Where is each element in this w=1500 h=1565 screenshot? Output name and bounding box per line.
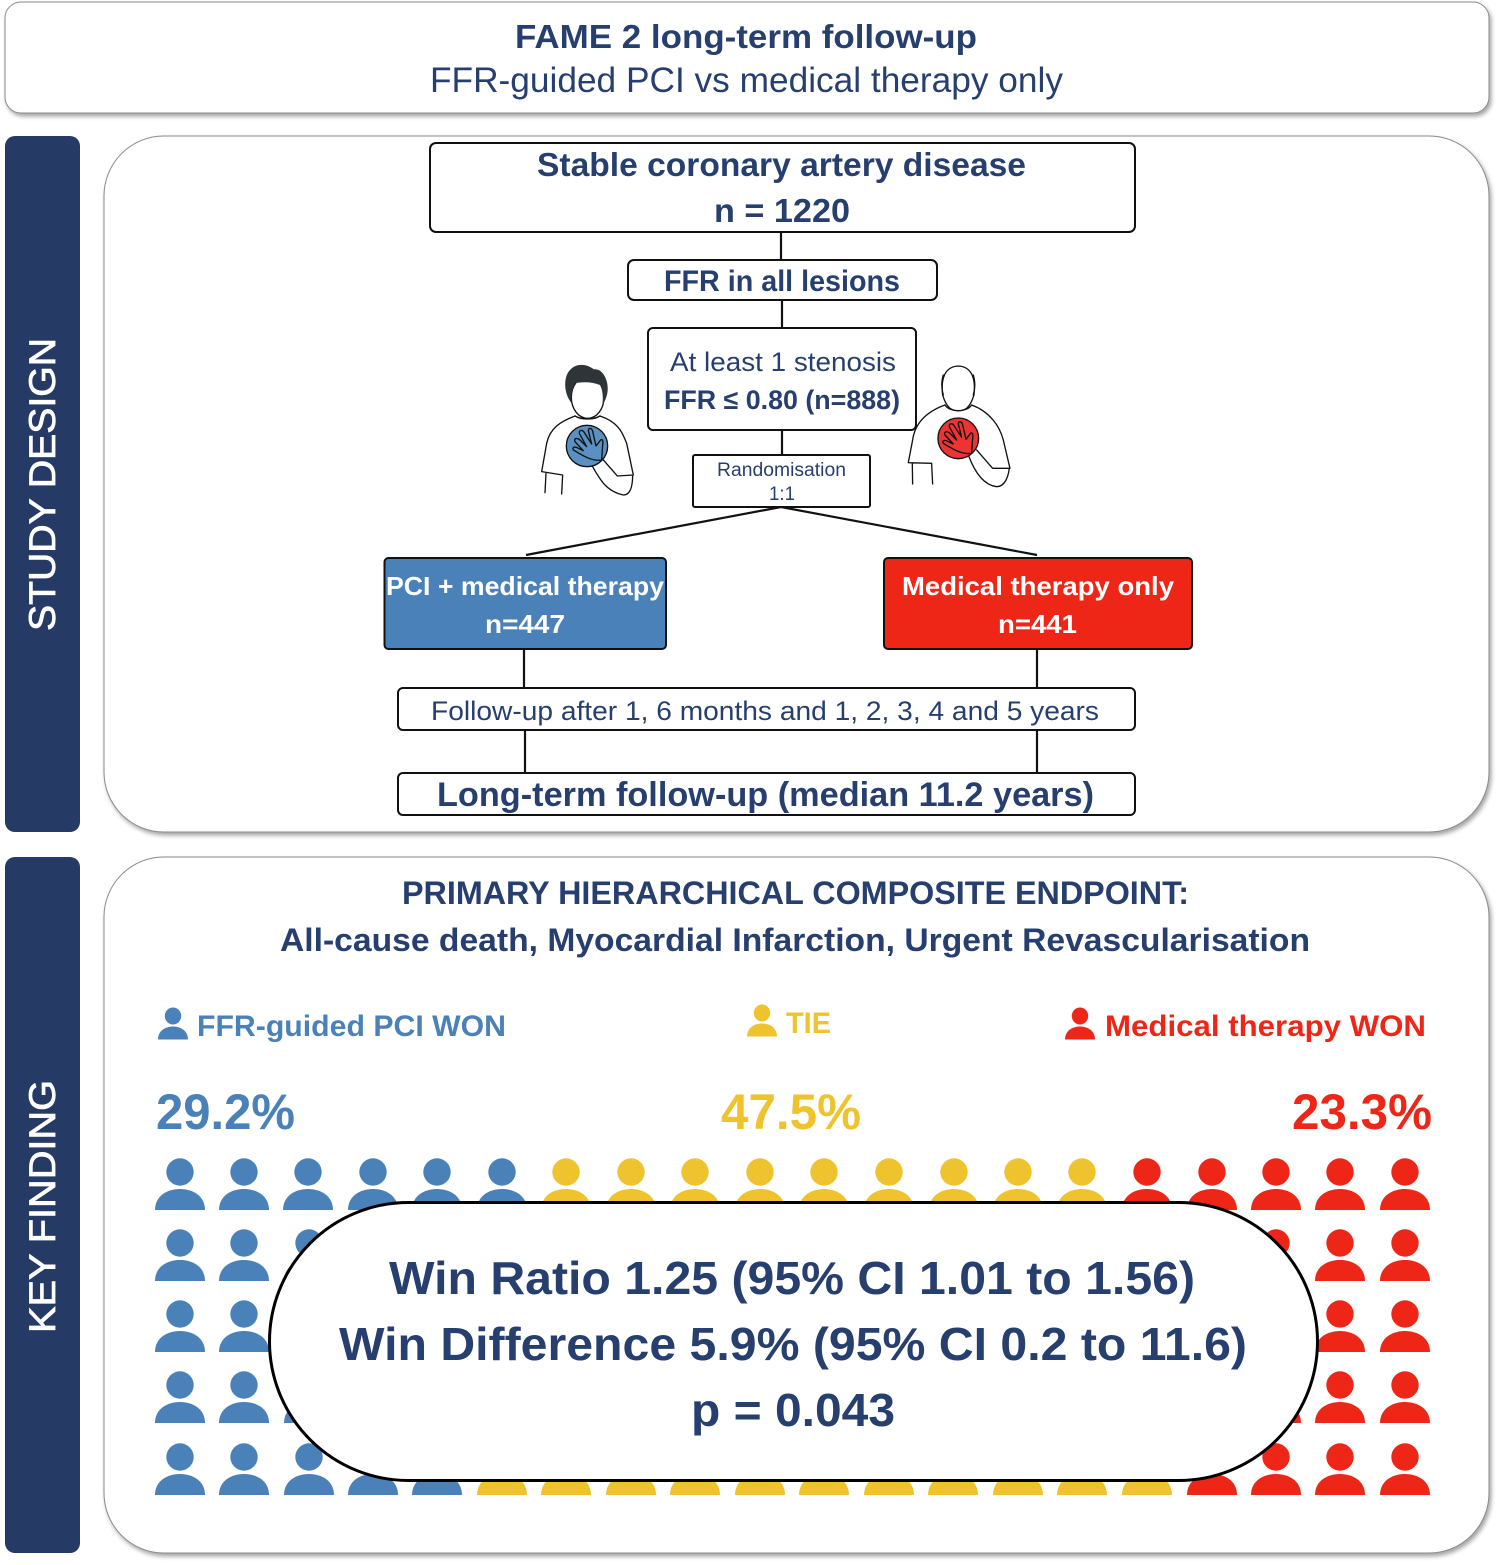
box: medical therapy arm: Medical therapy only xyxy=(902,571,1175,601)
box: FFR in all lesions: FFR in all lesions xyxy=(664,265,900,298)
legend: FFR-guided PCI won: FFR-guided PCI WON xyxy=(197,1010,506,1043)
pictogram: 100 patient icons xyxy=(155,1158,1430,1495)
sidebar: study design xyxy=(5,136,80,832)
endpoint heading: All-cause death, Myocardial Infarction, Urgent Revascularisation xyxy=(280,922,1310,958)
box: FFR in all lesions xyxy=(628,260,937,300)
sidebar: key finding: KEY FINDING xyxy=(22,1080,63,1333)
box: follow-up schedule: Follow-up after 1, 6 months and 1, 2, 3, 4 and 5 years xyxy=(431,696,1099,726)
percentage: FFR-guided PCI: 29.2% xyxy=(156,1084,295,1140)
subtitle: FFR-guided PCI vs medical therapy only xyxy=(430,61,1063,100)
callout: win ratio results: p = 0.043 xyxy=(691,1384,895,1436)
percentage: tie: 47.5% xyxy=(721,1084,861,1140)
box: stable coronary artery disease: Stable coronary artery disease xyxy=(537,146,1026,183)
box: long-term follow-up: Long-term follow-up (median 11.2 years) xyxy=(437,776,1094,814)
box: stable coronary artery disease xyxy=(430,143,1135,232)
legend: medical therapy won: Medical therapy WON xyxy=(1105,1010,1426,1043)
endpoint heading xyxy=(280,875,1310,958)
box: medical therapy arm: n=441 xyxy=(998,609,1077,639)
box: randomisation: Randomisation xyxy=(717,460,846,481)
panel: study design xyxy=(104,136,1489,832)
box: at least 1 stenosis: FFR ≤ 0.80 (n=888) xyxy=(664,385,900,415)
legend: tie xyxy=(747,1005,831,1040)
callout: win ratio results xyxy=(270,1202,1318,1480)
box: follow-up schedule xyxy=(398,688,1135,730)
endpoint heading: PRIMARY HIERARCHICAL COMPOSITE ENDPOINT: xyxy=(402,875,1189,911)
sidebar: key finding xyxy=(5,857,80,1553)
sidebar: study design: STUDY DESIGN xyxy=(22,338,63,631)
box: stable coronary artery disease: n = 1220 xyxy=(714,192,850,229)
header panel xyxy=(5,2,1489,113)
title: FAME 2 long-term follow-up xyxy=(515,18,977,55)
callout: win ratio results: Win Difference 5.9% (95% CI 0.2 to 11.6) xyxy=(339,1318,1247,1370)
box: medical therapy arm xyxy=(884,558,1192,649)
box: at least 1 stenosis: At least 1 stenosis xyxy=(670,347,896,377)
percentage: medical therapy: 23.3% xyxy=(1292,1084,1432,1140)
box: randomisation: 1:1 xyxy=(769,484,795,505)
box: PCI arm xyxy=(384,558,666,649)
box: randomisation xyxy=(693,455,870,507)
legend: tie: TIE xyxy=(786,1007,831,1040)
box: PCI arm: PCI + medical therapy xyxy=(386,571,665,601)
icon: patient with red heart xyxy=(908,366,1010,487)
flow connectors xyxy=(524,232,1037,773)
panel: key finding xyxy=(104,857,1489,1553)
callout: win ratio results: Win Ratio 1.25 (95% CI 1.01 to 1.56) xyxy=(389,1252,1195,1304)
box: at least 1 stenosis xyxy=(648,328,916,430)
box: PCI arm: n=447 xyxy=(485,609,565,639)
icon: patient with blue heart xyxy=(542,365,633,495)
